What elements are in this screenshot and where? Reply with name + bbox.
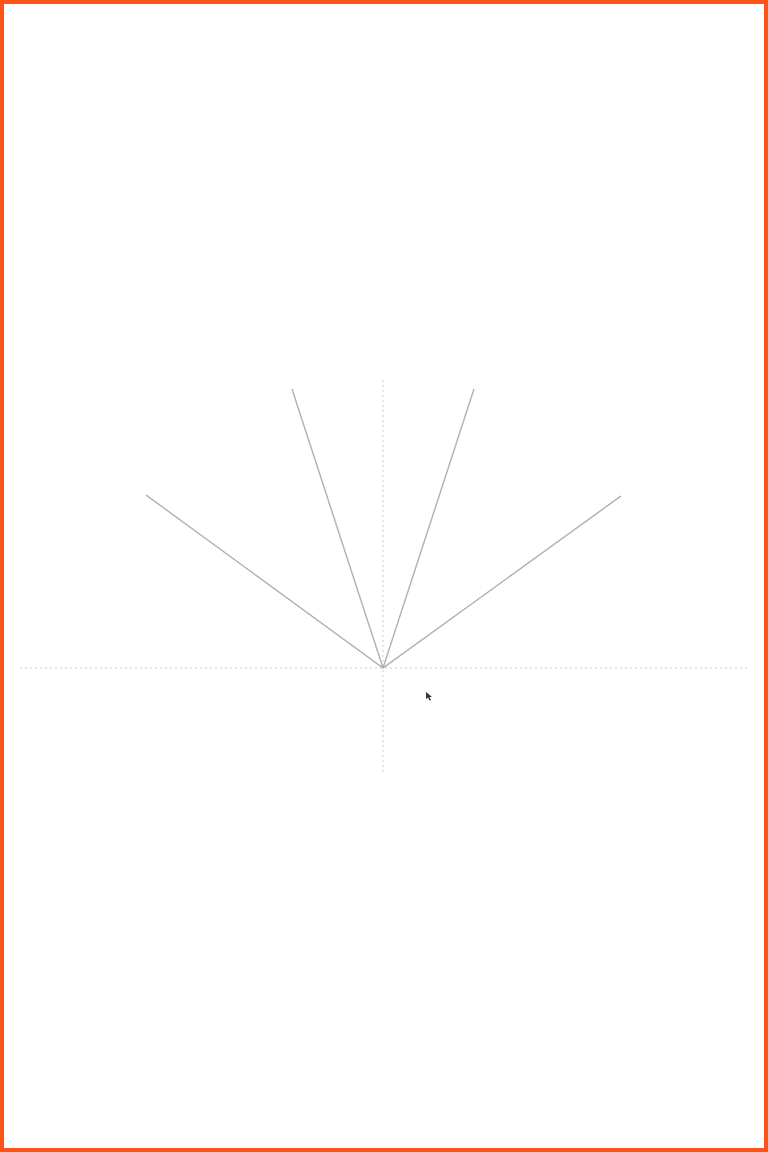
axis: horizontal dotted	[20, 667, 748, 669]
axis: vertical dotted	[382, 380, 384, 772]
fan lines	[146, 389, 621, 668]
icon: cursor	[426, 692, 432, 700]
